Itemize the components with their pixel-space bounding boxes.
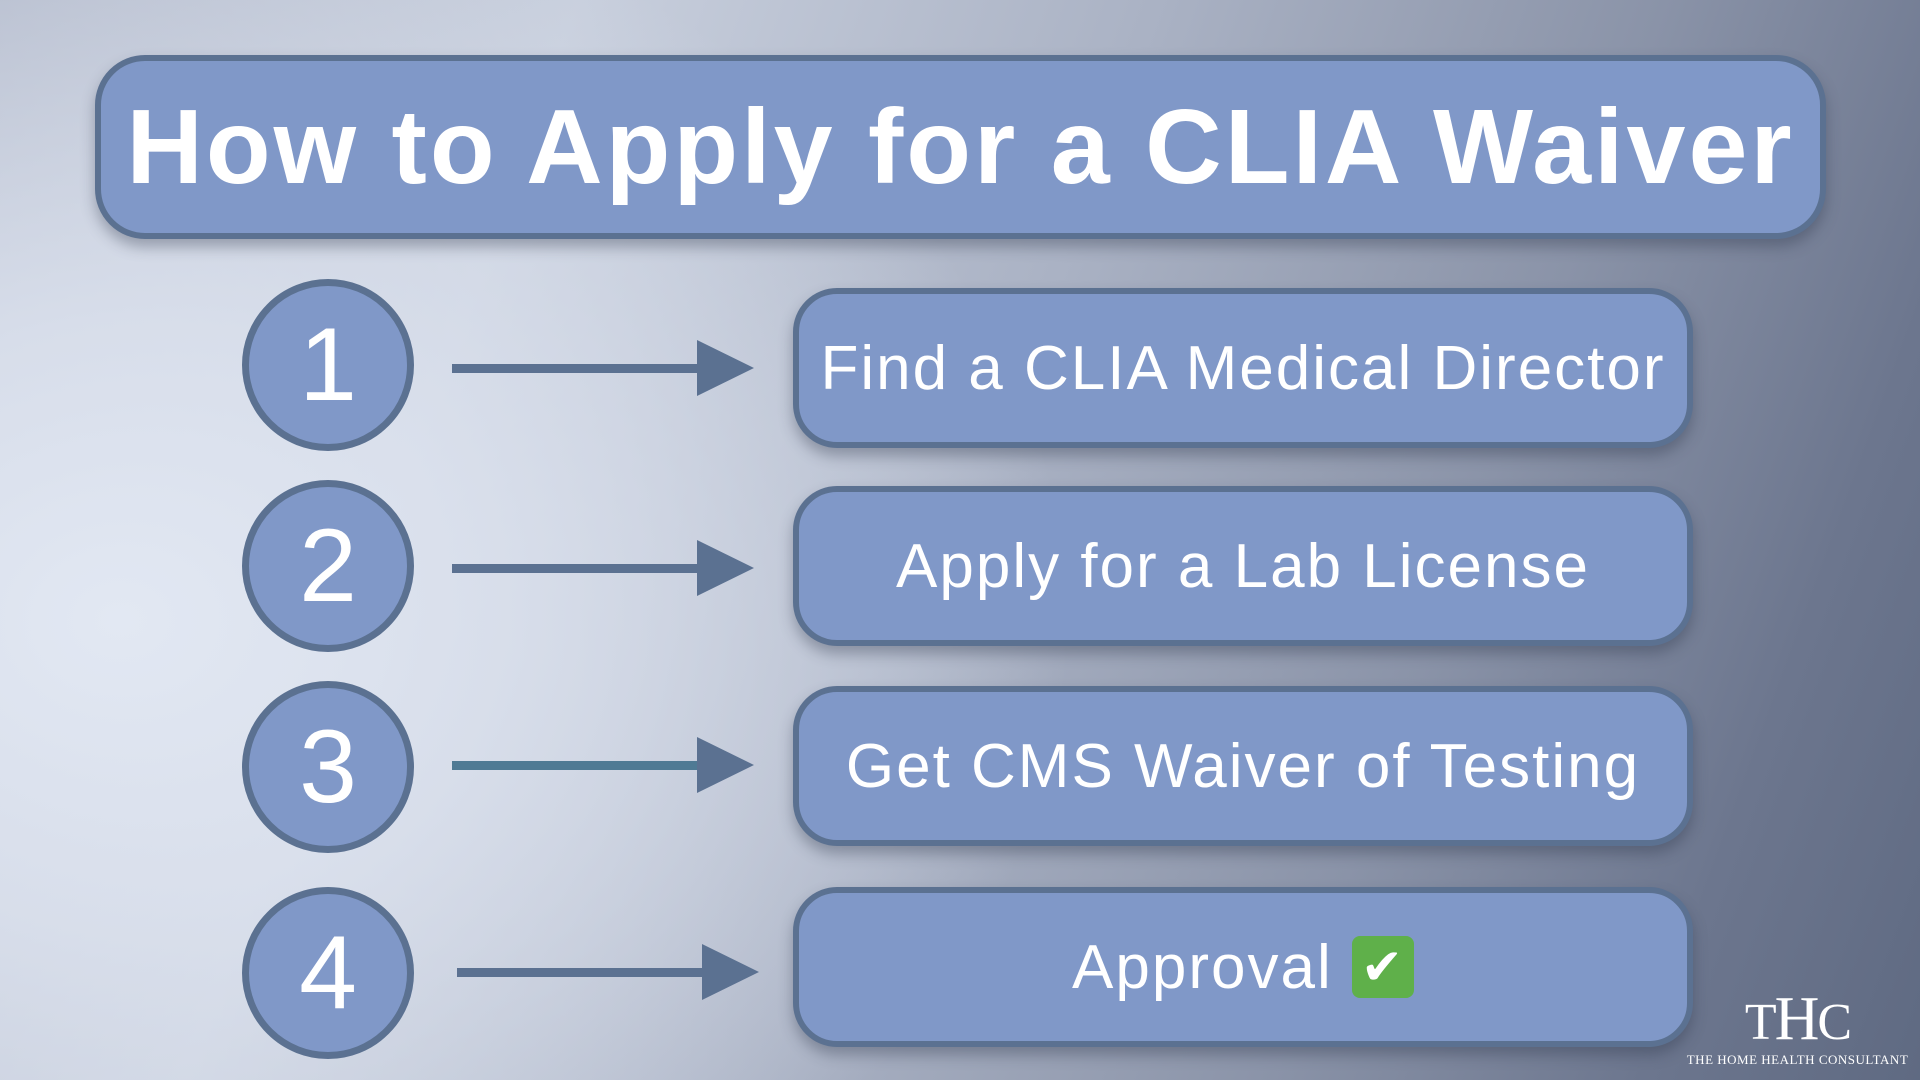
step 1 box: Find a CLIA Medical Director <box>820 334 1666 402</box>
logo: THC <box>1745 985 1850 1053</box>
logo: THE HOME HEALTH CONSULTANT <box>1687 1052 1908 1067</box>
step 1 box <box>793 288 1693 448</box>
step 4 number circle: 4 <box>299 914 357 1030</box>
step 4 box: Approval <box>1072 932 1333 1002</box>
step 3 number circle: 3 <box>299 708 357 824</box>
arrow 2 <box>452 540 754 596</box>
step 2 box <box>793 486 1693 646</box>
step 2 number circle: 2 <box>299 508 357 624</box>
step 3 number circle <box>242 681 414 853</box>
step 4 box <box>793 887 1693 1047</box>
step 3 box: Get CMS Waiver of Testing <box>846 732 1640 800</box>
step 4 number circle <box>242 887 414 1059</box>
step 1 number circle: 1 <box>299 306 357 422</box>
arrow 3 <box>452 737 754 793</box>
step 2 number circle <box>242 480 414 652</box>
step 4 box: ✔ <box>1361 938 1405 996</box>
step 2 box: Apply for a Lab License <box>896 532 1590 600</box>
arrow 4 <box>457 944 759 1000</box>
arrow 1 <box>452 340 754 396</box>
step 3 box <box>793 686 1693 846</box>
logo <box>1687 985 1908 1067</box>
title: How to Apply for a CLIA Waiver <box>126 88 1795 206</box>
title <box>95 55 1826 239</box>
step 1 number circle <box>242 279 414 451</box>
